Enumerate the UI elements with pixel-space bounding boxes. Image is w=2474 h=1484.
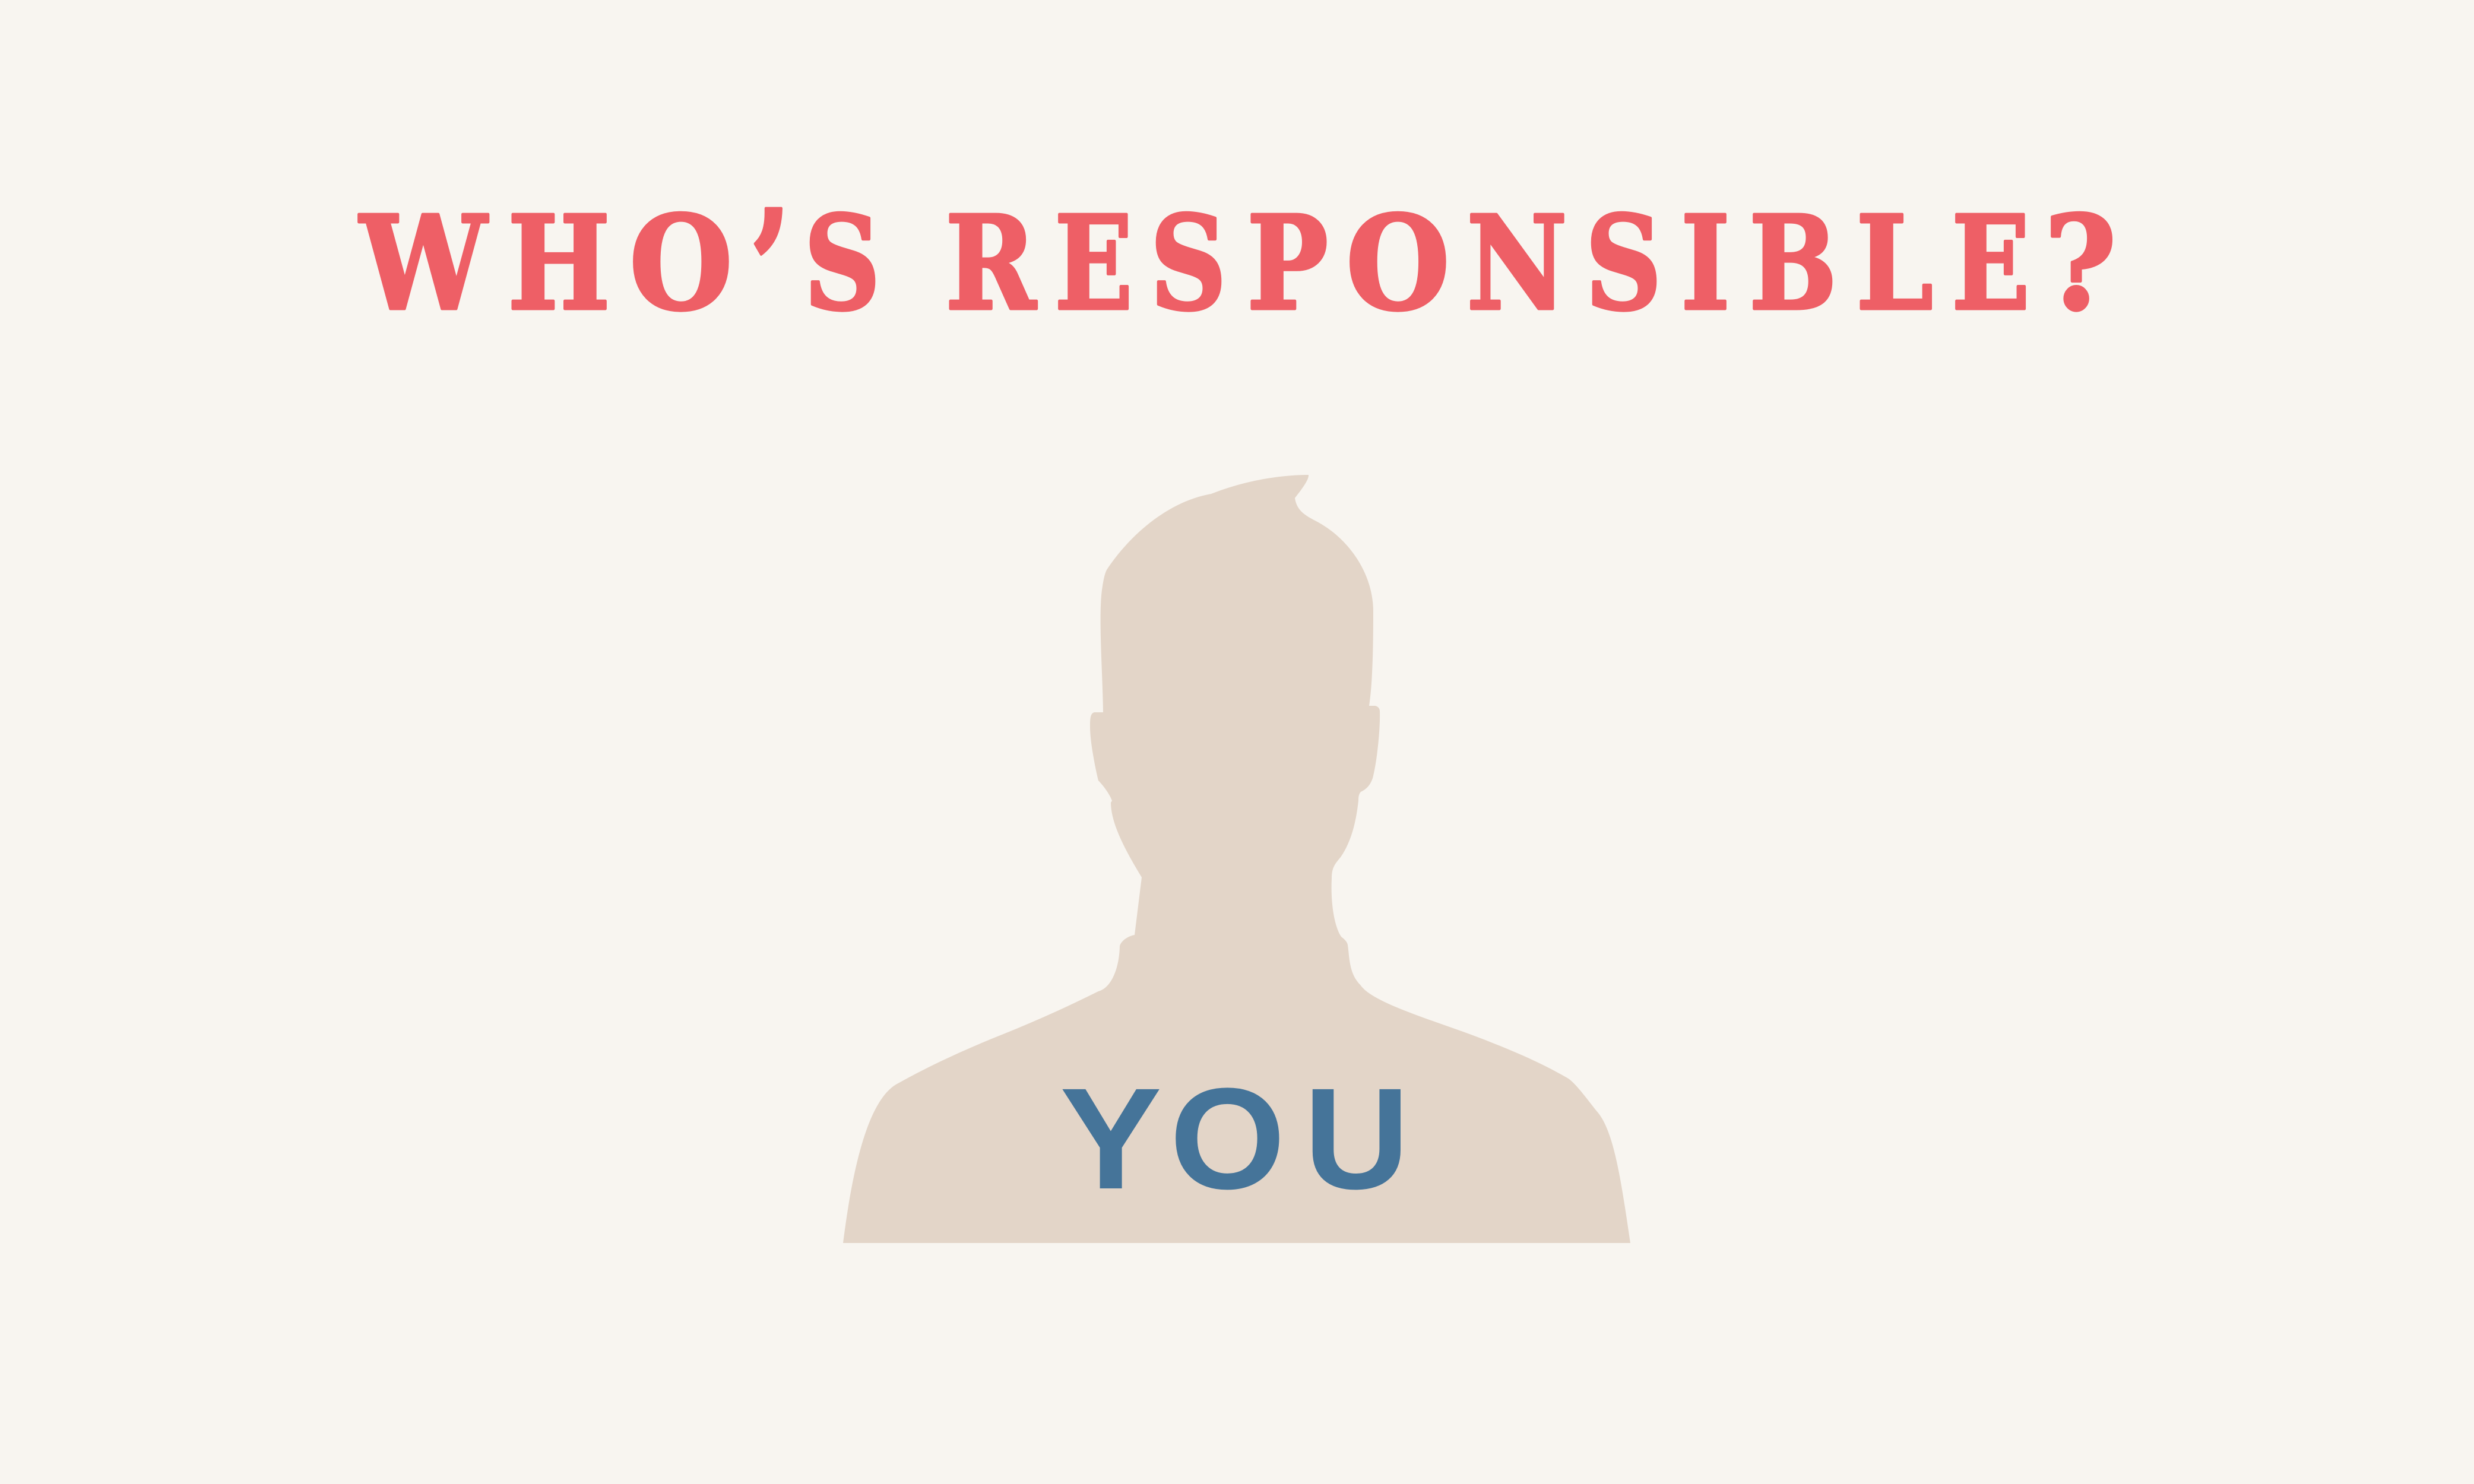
silhouette of a person [843, 475, 1630, 1243]
title: O [629, 188, 733, 340]
title: S [804, 188, 880, 340]
title: O [1346, 188, 1450, 340]
label: YOU [1060, 1058, 1409, 1219]
title: S [1150, 188, 1227, 340]
label: YOU: Y [1060, 1058, 1162, 1219]
label: YOU: U [1304, 1058, 1409, 1219]
title: S [1585, 188, 1662, 340]
title: N [1466, 188, 1567, 340]
title: ? [2044, 188, 2117, 340]
title: H [508, 188, 610, 340]
title: E [1054, 188, 1133, 340]
label: YOU: O [1170, 1058, 1285, 1219]
title: E [1952, 188, 2030, 340]
title: ’ [749, 175, 791, 363]
title: R [945, 188, 1037, 340]
title: L [1856, 188, 1933, 340]
title: P [1247, 188, 1328, 340]
title: I [1681, 188, 1730, 340]
title [359, 175, 2117, 363]
title: W [359, 188, 489, 340]
title: B [1749, 188, 1837, 340]
